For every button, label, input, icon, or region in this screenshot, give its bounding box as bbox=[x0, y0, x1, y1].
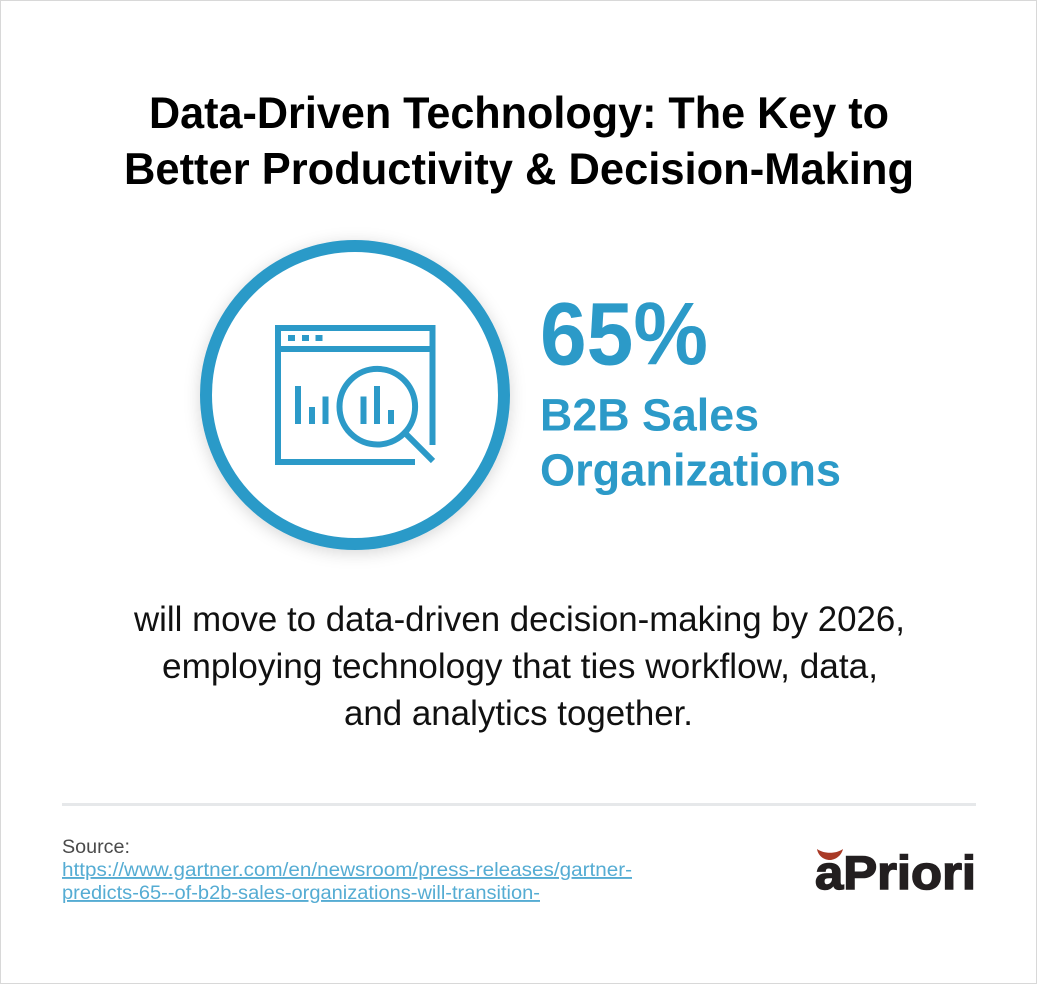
icon: browser window with magnifier bbox=[275, 325, 436, 465]
title: Data-Driven Technology: The Key to bbox=[149, 89, 889, 138]
description text: will move to data-driven decision-making by 2026, bbox=[133, 600, 905, 639]
title: Better Productivity & Decision-Making bbox=[124, 145, 914, 194]
description text: employing technology that ties workflow, data, bbox=[162, 647, 878, 686]
description text bbox=[133, 600, 905, 733]
stat label: B2B Sales bbox=[540, 390, 759, 440]
source citation: predicts-65--of-b2b-sales-organizations-will-transition- bbox=[62, 883, 540, 904]
stat label bbox=[540, 390, 841, 496]
description text: and analytics together. bbox=[344, 694, 693, 733]
stat: 65%: 65% bbox=[540, 284, 708, 384]
logo accent: red arc bbox=[817, 849, 843, 860]
logo: aPriori: aPriori bbox=[815, 846, 976, 899]
source citation: Source: bbox=[62, 837, 130, 858]
stat label: Organizations bbox=[540, 444, 841, 496]
ring bbox=[206, 246, 504, 544]
source citation: https://www.gartner.com/en/newsroom/press-releases/gartner- bbox=[62, 860, 632, 881]
source citation bbox=[62, 837, 632, 904]
title bbox=[124, 89, 914, 194]
icon: ringed circle with analytics window bbox=[206, 246, 504, 544]
